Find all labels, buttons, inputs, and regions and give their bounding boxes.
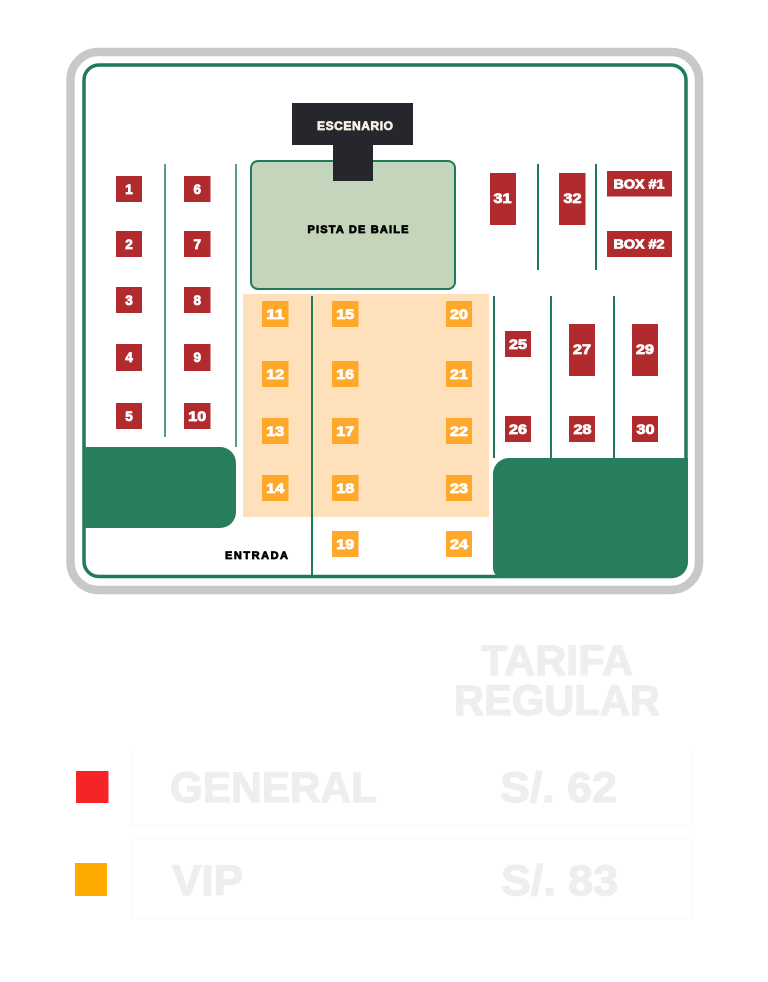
seat 17 — [332, 418, 358, 444]
seat 10: 10 — [188, 409, 206, 424]
box 1: BOX #1 — [614, 178, 665, 192]
green block left — [84, 447, 236, 528]
seat 24: 24 — [450, 537, 469, 552]
seat 23: 23 — [450, 481, 469, 496]
seat 19 — [332, 531, 358, 557]
label: general: GENERAL — [170, 764, 377, 812]
legend swatch: general — [76, 771, 108, 803]
price: vip: S/. 83 — [501, 857, 618, 905]
seat 22: 22 — [450, 424, 468, 439]
box 2 — [607, 231, 672, 257]
seat 16: 16 — [336, 367, 355, 382]
seat 27: 27 — [573, 342, 591, 357]
seat 7: 7 — [194, 237, 201, 252]
seat 12 — [262, 361, 288, 387]
seat 22 — [446, 418, 472, 444]
seat 1 — [116, 176, 142, 202]
legend swatch: vip — [75, 863, 107, 896]
seat 29 — [632, 324, 658, 376]
seat 20 — [446, 301, 472, 327]
seat 32: 32 — [564, 191, 582, 206]
seat 18 — [332, 475, 358, 501]
seat 15 — [332, 301, 358, 327]
dance floor: PISTA DE BAILE — [308, 224, 408, 236]
seat 17: 17 — [336, 424, 354, 439]
seat 4 — [116, 344, 142, 371]
seat 8 — [184, 287, 210, 313]
price table — [75, 637, 693, 919]
seat 11: 11 — [266, 307, 285, 322]
seat 14 — [262, 475, 288, 501]
seat 6: 6 — [194, 182, 202, 197]
price: general: S/. 62 — [500, 764, 617, 812]
seat 31: 31 — [494, 191, 512, 206]
stage — [292, 103, 413, 181]
seat 7 — [184, 231, 210, 257]
box 2: BOX #2 — [614, 238, 665, 252]
seat 1: 1 — [125, 182, 133, 197]
seat 30 — [632, 416, 658, 442]
seat 25: 25 — [509, 337, 528, 352]
seat 16 — [332, 361, 358, 387]
seat 3 — [116, 287, 142, 313]
row: vip — [75, 839, 693, 919]
column heading: tarifa regular: REGULAR — [454, 677, 660, 725]
seat 4: 4 — [125, 350, 133, 365]
seat 28: 28 — [574, 422, 592, 437]
seat 28 — [569, 416, 595, 442]
label: vip: VIP — [172, 857, 243, 905]
seat 15: 15 — [336, 307, 355, 322]
entrance label: ENTRADA — [225, 550, 288, 562]
box 1 — [607, 171, 672, 196]
seat 14: 14 — [266, 481, 285, 496]
row: general — [76, 746, 691, 825]
venue map — [70, 52, 699, 590]
seat 31 — [490, 173, 516, 225]
seat 23 — [446, 475, 472, 501]
seat 13 — [262, 418, 288, 444]
seat 27 — [569, 324, 595, 376]
column heading: tarifa regular: TARIFA — [481, 637, 633, 685]
seat 24 — [446, 531, 472, 557]
seat 21: 21 — [450, 367, 469, 382]
seat 20: 20 — [450, 307, 468, 322]
seat 19: 19 — [336, 537, 354, 552]
seat 21 — [446, 361, 472, 387]
seat 26: 26 — [509, 422, 528, 437]
column heading: tarifa regular — [454, 637, 660, 725]
stage: ESCENARIO — [317, 119, 393, 133]
seat 6 — [184, 176, 210, 202]
seat 30: 30 — [636, 422, 654, 437]
seat 32 — [559, 173, 586, 225]
seat 5: 5 — [125, 409, 133, 424]
seat 9 — [184, 344, 210, 371]
seat 13: 13 — [266, 424, 285, 439]
seat 9: 9 — [194, 350, 201, 365]
seat 10 — [184, 403, 210, 429]
seat 12: 12 — [266, 367, 284, 382]
seat 2: 2 — [125, 237, 133, 252]
dance floor — [251, 161, 455, 289]
seat 8: 8 — [194, 293, 202, 308]
seat 11 — [262, 301, 288, 327]
VIP zone background — [243, 294, 489, 517]
green block right — [493, 458, 688, 578]
seat 25 — [505, 331, 531, 357]
seat 3: 3 — [125, 293, 133, 308]
seat 26 — [505, 416, 531, 442]
outer grey frame — [70, 52, 699, 590]
seat 5 — [116, 403, 142, 429]
green inner border — [84, 65, 686, 576]
seat 29: 29 — [636, 342, 654, 357]
seat 18: 18 — [336, 481, 355, 496]
seat 2 — [116, 231, 142, 257]
